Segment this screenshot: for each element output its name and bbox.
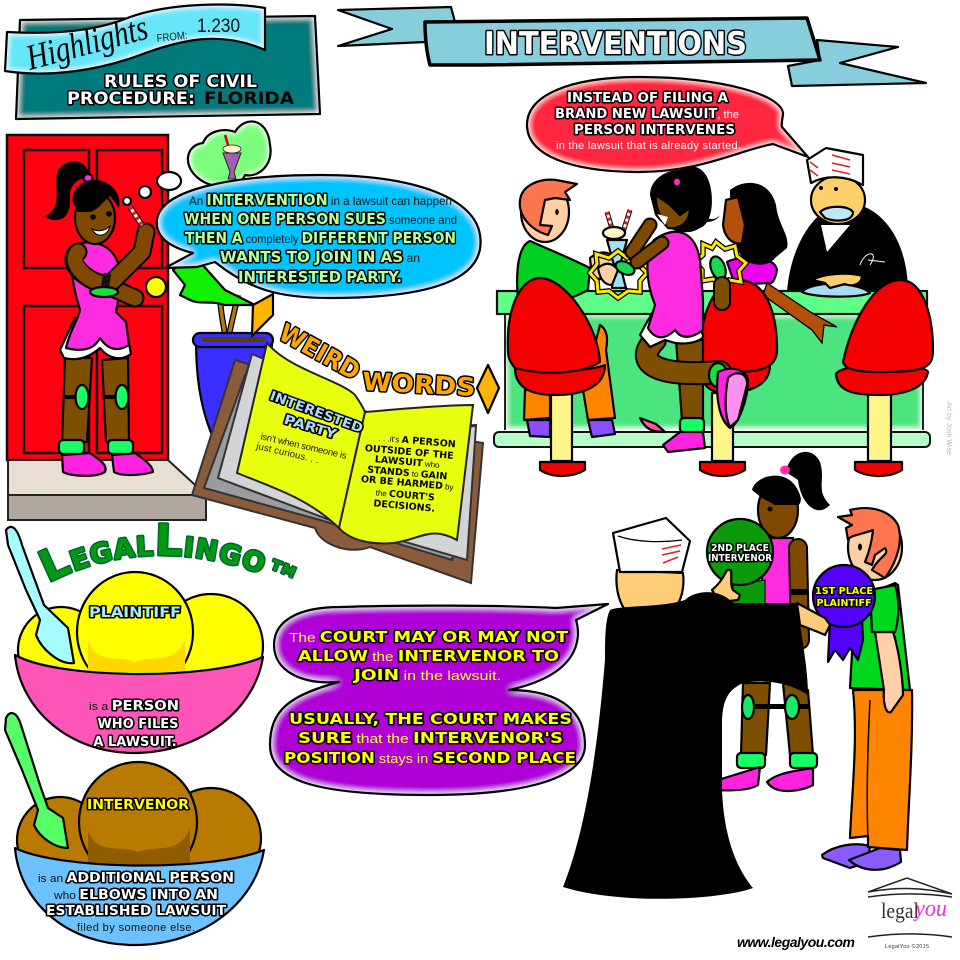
boy with ribbon [822,508,912,870]
speech bubble: instead of filing: BRAND NEW LAWSUIT, the [555,107,739,122]
door [7,135,168,460]
speech bubble: instead of filing: INSTEAD OF FILING A [567,91,728,106]
book left page text: just curious. . . [254,441,320,466]
girl intervenor [718,452,830,791]
book left page text: INTERESTED [268,389,365,437]
ribbon: first place [813,565,875,662]
book right page text: . . .it's A PERSON [378,433,456,450]
thought bubble: milkshake [123,121,271,205]
speech bubble: instead of filing: in the lawsuit that is already started. [556,140,741,152]
ribbon: highlights: FROM: [156,30,188,45]
chef from behind [563,518,830,899]
book left page text [254,389,365,466]
right stool [836,280,933,476]
intervenor labels: is an ADDITIONAL PERSON [38,871,234,886]
website: www.legalyou.com [737,934,855,950]
logo: legalyou: legal [881,898,919,923]
heading: weird words [252,294,499,413]
ribbon: second place: 2ND PLACE [711,543,769,554]
heading: rules of civil procedure: RULES OF CIVIL [104,72,257,92]
speech bubble: instead of filing: PERSON INTERVENES [574,123,735,138]
speech bubble: court: POSITION stays in SECOND PLACE [284,749,576,767]
book right page text: STANDS to GAIN [367,465,448,482]
spoon [6,527,74,663]
book right page text: DECISIONS. [373,498,435,515]
speech bubble: court [270,604,608,795]
plaintiff labels [89,605,181,750]
intervenor labels: INTERVENOR [87,798,189,813]
ribbon: highlights [5,5,265,78]
book right page text: OR BE HARMED by [360,474,454,493]
book right page text [360,433,456,515]
banner: interventions title [338,7,926,86]
banner: interventions title: INTERVENTIONS [484,26,747,62]
chef behind counter [787,148,908,292]
door step [8,460,206,520]
heading: rules of civil procedure: FLORIDA [204,89,295,109]
counter [494,274,930,447]
intervenor labels: ESTABLISHED LAWSUIT [46,904,226,919]
intervenor labels: who ELBOWS INTO AN [53,888,218,903]
speech bubble: court: SURE that the INTERVENOR'S [298,729,563,747]
logo: legalyou [868,878,952,950]
speech bubble: definition [157,175,481,298]
logo: legalyou: you [913,896,947,922]
plaintiff labels: A LAWSUIT. [93,735,177,750]
book right page text: LAWSUIT who [374,454,441,471]
intervenor labels: filed by someone else. [77,922,195,934]
plaintiff labels: is a PERSON [89,699,179,714]
speech bubble: instead of filing [527,77,808,172]
bowl: intervenor [5,713,264,945]
ribbon: first place: PLAINTIFF [816,598,872,609]
logo: legalyou: LegalYou ©2015 [885,943,929,950]
spoon [5,713,68,848]
speech bubble: court: USUALLY, THE COURT MAKES [289,710,572,728]
boy at counter [517,180,617,437]
girl at counter [632,166,748,452]
book right page text: OUTSIDE OF THE [364,443,454,462]
speech bubble: court: ALLOW the INTERVENOR TO [298,647,559,665]
speech bubble: definition: An INTERVENTION in a lawsuit can happen [189,191,452,209]
panel: highlights header [5,5,320,119]
left stool [508,278,605,476]
ribbon: highlights: 1.230 [197,16,240,37]
plaintiff labels: PLAINTIFF [89,605,181,621]
ribbon: second place [707,519,773,605]
heading: legal lingo: TM [272,558,298,579]
door scene [7,135,206,520]
ribbon: highlights: Highlights [21,7,152,78]
intervenor labels [38,798,234,934]
speech bubble: court: The COURT MAY OR MAY NOT [289,628,569,646]
heading: weird words: WEIRD [274,318,365,386]
heading: rules of civil procedure [67,72,295,109]
book left page text: PARTY [282,413,339,443]
heading: rules of civil procedure: PROCEDURE: [67,89,195,109]
book left page text: isn't when someone is [259,431,348,462]
speech bubble: definition: WHEN ONE PERSON SUES someone and [184,210,457,228]
speech bubble: definition: INTERESTED PARTY. [238,268,402,286]
middle stool [700,280,777,476]
girl with long hair [723,183,837,343]
bottom scene [563,452,912,899]
ribbon: second place: INTERVENOR [708,553,773,564]
heading: legal lingo: LEGALLINGO [37,522,266,583]
milkshake and elbow bursts [590,210,746,298]
book: weird words [192,343,483,583]
diner scene [494,148,933,476]
artist credit: Art by Josh Wise [945,402,952,455]
girl thinking [45,161,153,476]
plaintiff labels: WHO FILES [97,717,179,732]
book right page text: the COURT'S [375,487,435,504]
bowl: plaintiff [6,527,263,753]
heading: weird words: WORDS [362,367,476,402]
speech bubble: court: JOIN in the lawsuit. [353,666,501,684]
speech bubble: definition: WANTS TO JOIN IN AS an [220,248,420,266]
plant in pot [173,262,273,442]
speech bubble: definition: THEN A completely DIFFERENT PERSON [185,229,456,247]
ribbon: first place: 1ST PLACE [815,586,873,597]
